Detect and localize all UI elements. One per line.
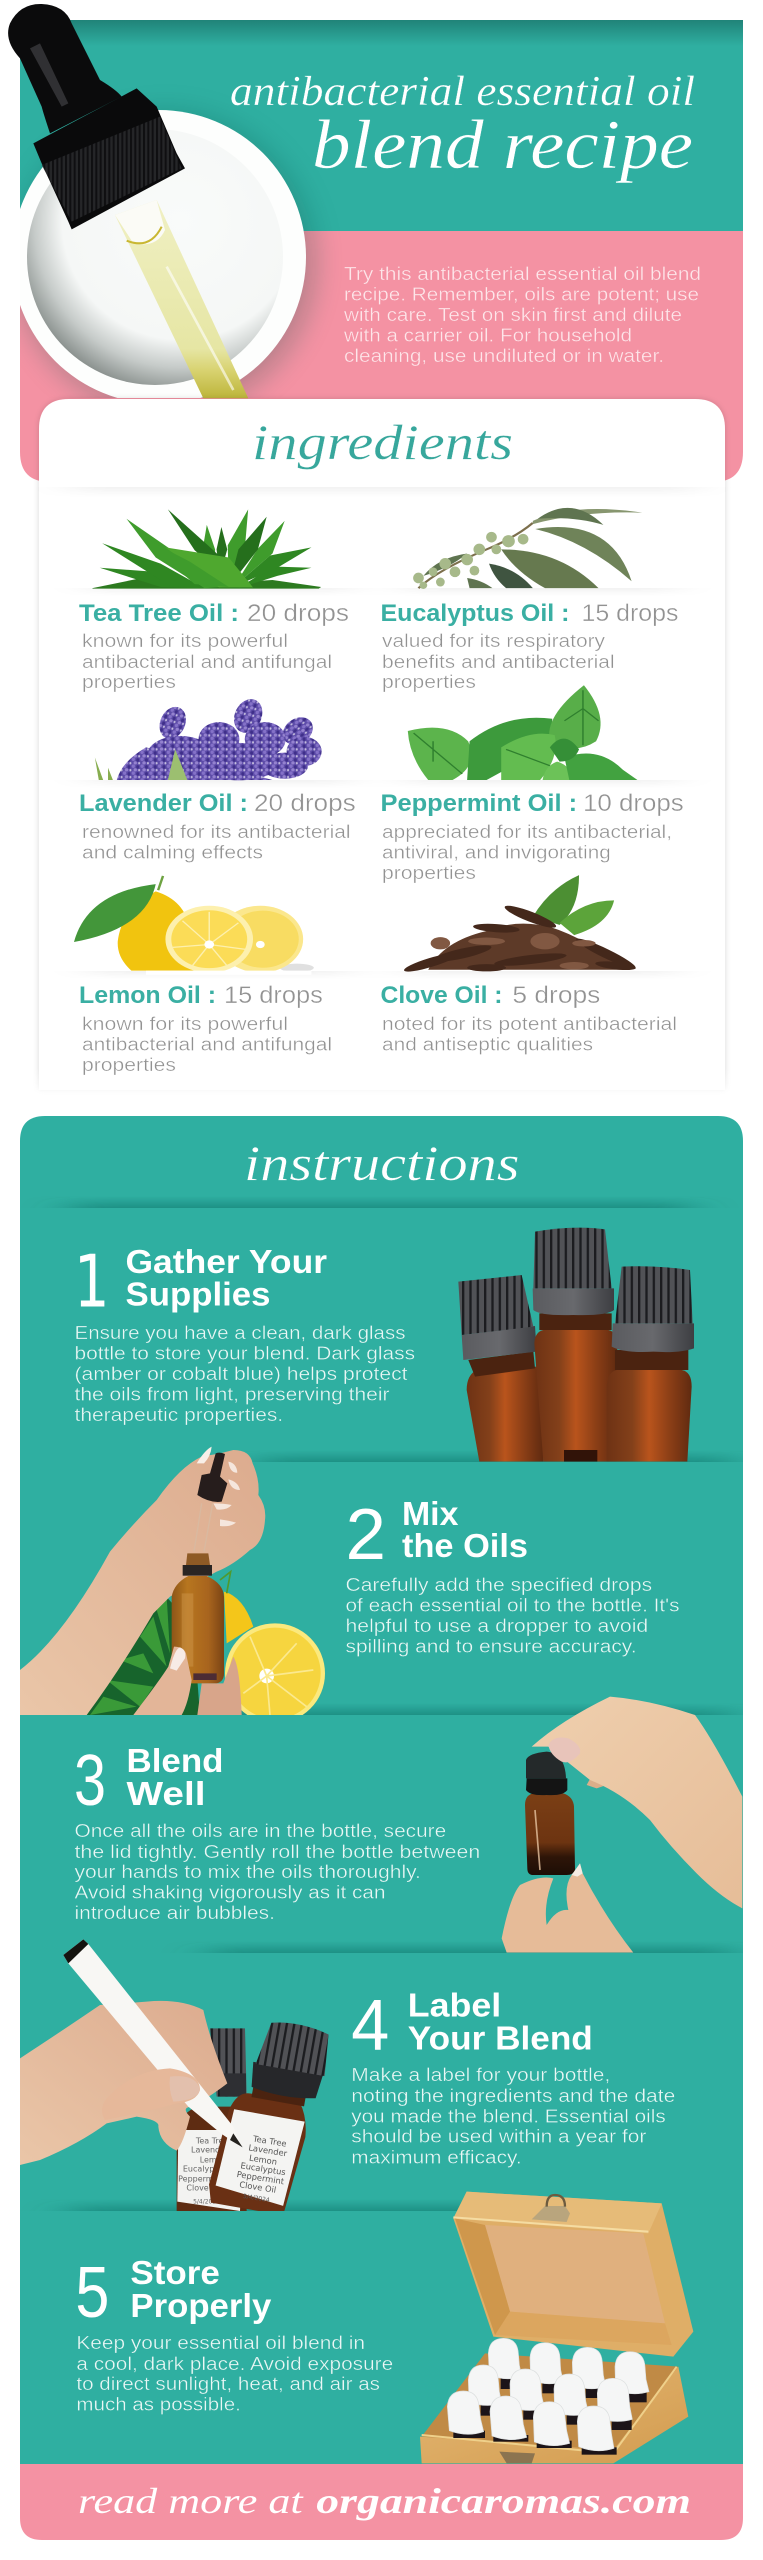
ingredient: clove oil: 5 drops	[512, 982, 600, 1009]
ingredient: eucalyptus oil: Eucalyptus Oil :	[380, 600, 570, 627]
ingredient: clove oil: Clove Oil :	[380, 982, 502, 1009]
step 5 text: Keep your essential oil blend in	[76, 2333, 365, 2353]
step 5 text: to direct sunlight, heat, and air as	[76, 2374, 380, 2394]
ingredient: lemon oil: 15 drops	[224, 982, 323, 1009]
step 2 text	[346, 1575, 680, 1657]
header pink band	[20, 231, 743, 482]
step 2 heading	[402, 1495, 528, 1564]
ingredient: lemon oil: known for its powerful	[82, 1014, 288, 1034]
number 1: 1	[74, 1240, 110, 1324]
image: eucalyptus	[413, 508, 642, 589]
ingredient: peppermint oil	[380, 790, 684, 883]
intro paragraph: with care. Test on skin first and dilute	[343, 305, 682, 325]
bottle label text: Clove Oil	[239, 2179, 277, 2195]
number 3: 3	[74, 1741, 106, 1821]
step 4 text: Make a label for your bottle,	[351, 2065, 610, 2085]
step 4 text: maximum efficacy.	[351, 2148, 522, 2168]
ingredient: peppermint oil: 10 drops	[583, 790, 684, 817]
image: hand writing label on bottles: Lavender	[191, 2146, 229, 2155]
step 2 text: Carefully add the specified drops	[346, 1575, 652, 1595]
image: hand writing label on bottles: Lemon	[200, 2156, 227, 2165]
ingredient: lavender oil: renowned for its antibacterial	[82, 822, 351, 842]
ingredient: eucalyptus oil: 15 drops	[582, 600, 678, 627]
image: tea tree	[92, 509, 321, 589]
ingredient: clove oil: noted for its potent antibacterial	[382, 1014, 677, 1034]
ingredient: lemon oil: properties	[82, 1055, 176, 1075]
intro paragraph: recipe. Remember, oils are potent; use	[344, 284, 699, 304]
ingredient: eucalyptus oil: valued for its respiratory	[382, 631, 605, 651]
step 1 text	[74, 1323, 415, 1425]
ingredient: eucalyptus oil: properties	[382, 672, 476, 692]
step 5 text: much as possible.	[76, 2394, 241, 2414]
number 2: 2	[346, 1495, 386, 1575]
panel: header	[8, 4, 743, 482]
step 1 heading	[126, 1243, 327, 1312]
ingredient: tea tree oil: 20 drops	[247, 600, 349, 627]
ingredient: peppermint oil: antiviral, and invigorating	[382, 842, 611, 862]
step 4 text: noting the ingredients and the date	[351, 2086, 675, 2106]
header teal band	[20, 20, 743, 232]
bottle label text: Peppermint	[236, 2169, 286, 2186]
ingredient: tea tree oil: known for its powerful	[82, 631, 288, 651]
image: wooden box with bottles	[420, 2192, 693, 2463]
step 4: label your blend	[20, 1939, 675, 2218]
heading: instructions: instructions	[244, 1135, 520, 1191]
step 5 heading: Store	[130, 2254, 220, 2291]
ingredient: clove oil	[380, 982, 677, 1054]
ingredient: lemon oil: antibacterial and antifungal	[82, 1034, 332, 1054]
step 4 text: you made the blend. Essential oils	[351, 2106, 666, 2126]
step 2 text: of each essential oil to the bottle. It's	[346, 1596, 680, 1616]
image: lemon	[74, 876, 314, 975]
step 1: gather your supplies	[74, 1228, 694, 1462]
step 1 text: (amber or cobalt blue) helps protect	[74, 1364, 408, 1384]
step 4 text	[351, 2065, 675, 2168]
image: peppermint	[408, 685, 637, 780]
step 2 heading: Mix	[402, 1495, 459, 1532]
ingredient: lavender oil	[79, 790, 356, 862]
step 1 heading: Gather Your	[126, 1243, 327, 1280]
step 4 heading	[408, 1986, 593, 2056]
image: three amber bottles	[458, 1228, 694, 1462]
number 4: 4	[351, 1986, 389, 2066]
ingredient: tea tree oil: antibacterial and antifungal	[82, 652, 332, 672]
step 5: store properly	[75, 2192, 693, 2463]
intro paragraph	[343, 264, 701, 366]
image: hand writing label on bottles: Tea Tree	[195, 2136, 228, 2145]
ingredient: peppermint oil: properties	[382, 863, 476, 883]
intro paragraph: with a carrier oil. For household	[343, 326, 632, 346]
step 3 heading: Well	[126, 1775, 206, 1812]
footer text: read more at	[78, 2481, 304, 2521]
step 5 heading: Properly	[130, 2287, 272, 2324]
ingredient: lemon oil: Lemon Oil :	[79, 982, 216, 1009]
bottle label text: 5/4/2024	[242, 2193, 270, 2204]
step 2 text: helpful to use a dropper to avoid	[346, 1616, 648, 1636]
step 4 heading: Your Blend	[408, 2019, 593, 2056]
step 3 text: the lid tightly. Gently roll the bottle between	[74, 1842, 480, 1862]
step 5 heading	[130, 2254, 272, 2324]
step 2: mix the oils	[20, 1447, 680, 1723]
image: hands holding small bottle	[502, 1697, 742, 1953]
ingredient: eucalyptus oil: benefits and antibacterial	[382, 652, 615, 672]
step 2 heading: the Oils	[402, 1527, 528, 1564]
intro paragraph: Try this antibacterial essential oil blend	[344, 264, 701, 284]
step 3 text	[74, 1821, 480, 1923]
step 3 text: Once all the oils are in the bottle, secure	[74, 1821, 446, 1841]
image: hand writing label on bottles: Peppermint	[178, 2175, 224, 2184]
image: clove	[402, 875, 638, 975]
ingredient: eucalyptus oil	[380, 600, 678, 692]
ingredient images	[74, 508, 642, 975]
panel: ingredients	[30, 399, 734, 1100]
image: hand writing label on bottles	[20, 1939, 333, 2218]
ingredient: peppermint oil: appreciated for its antibacterial,	[382, 822, 672, 842]
footer banner	[20, 2464, 743, 2540]
ingredient: lavender oil: Lavender Oil :	[79, 790, 248, 817]
intro paragraph: cleaning, use undiluted or in water.	[344, 346, 664, 366]
step 3 text: Avoid shaking vigorously as it can	[74, 1883, 386, 1903]
image: hand writing label on bottles: Eucalyptus	[183, 2165, 227, 2174]
image: hand writing label on bottles: 5/4/2024	[193, 2198, 220, 2205]
bottle label text: Lemon	[248, 2153, 278, 2167]
step 5 text	[76, 2333, 393, 2414]
title: antibacterial essential oil: antibacterial essential oil	[230, 69, 695, 115]
panel: instructions	[20, 1116, 743, 2490]
image: hand with dropper bottle, lemon and leaves	[20, 1447, 325, 1723]
step 1 text: the oils from light, preserving their	[74, 1385, 390, 1405]
image: hand writing label on bottles: Clove Oil	[186, 2184, 222, 2193]
box clasp	[532, 2195, 570, 2222]
step 3 text: introduce air bubbles.	[74, 1903, 275, 1923]
step 1 text: therapeutic properties.	[74, 1405, 283, 1425]
step 1 text: bottle to store your blend. Dark glass	[74, 1344, 415, 1364]
photo: dish with oil dropper	[8, 4, 315, 412]
ingredient: tea tree oil: properties	[82, 672, 176, 692]
ingredient: peppermint oil: Peppermint Oil :	[380, 790, 577, 817]
ingredient: tea tree oil: Tea Tree Oil :	[79, 600, 239, 627]
step 3: blend well	[74, 1697, 742, 1953]
bottle label text: Eucalyptus	[240, 2160, 286, 2177]
number 5: 5	[75, 2253, 109, 2333]
footer banner: organicaromas.com	[316, 2481, 691, 2521]
ingredient: lavender oil: and calming effects	[82, 842, 263, 862]
bottle label text: Lavender	[248, 2142, 288, 2158]
step 1 heading: Supplies	[126, 1276, 270, 1312]
ingredient: clove oil: and antiseptic qualities	[382, 1034, 593, 1054]
step 3 text: your hands to mix the oils thoroughly.	[74, 1862, 421, 1882]
step 4 heading: Label	[408, 1986, 501, 2024]
ingredient: lemon oil	[79, 982, 332, 1075]
bottle label text: Tea Tree	[251, 2133, 287, 2149]
image: lavender	[95, 696, 322, 780]
step 3 heading	[126, 1742, 224, 1812]
step 3 heading: Blend	[126, 1742, 224, 1779]
ingredient: lavender oil: 20 drops	[254, 790, 356, 817]
step 1 text: Ensure you have a clean, dark glass	[74, 1323, 406, 1343]
step 2 text: spilling and to ensure accuracy.	[346, 1637, 636, 1657]
bottle label text	[236, 2133, 288, 2204]
ingredient: tea tree oil	[79, 600, 349, 692]
step 5 text: a cool, dark place. Avoid exposure	[76, 2354, 393, 2374]
heading: ingredients: ingredients	[252, 414, 513, 470]
step 4 text: should be used within a year for	[351, 2127, 646, 2147]
title: blend recipe: blend recipe	[312, 107, 693, 184]
